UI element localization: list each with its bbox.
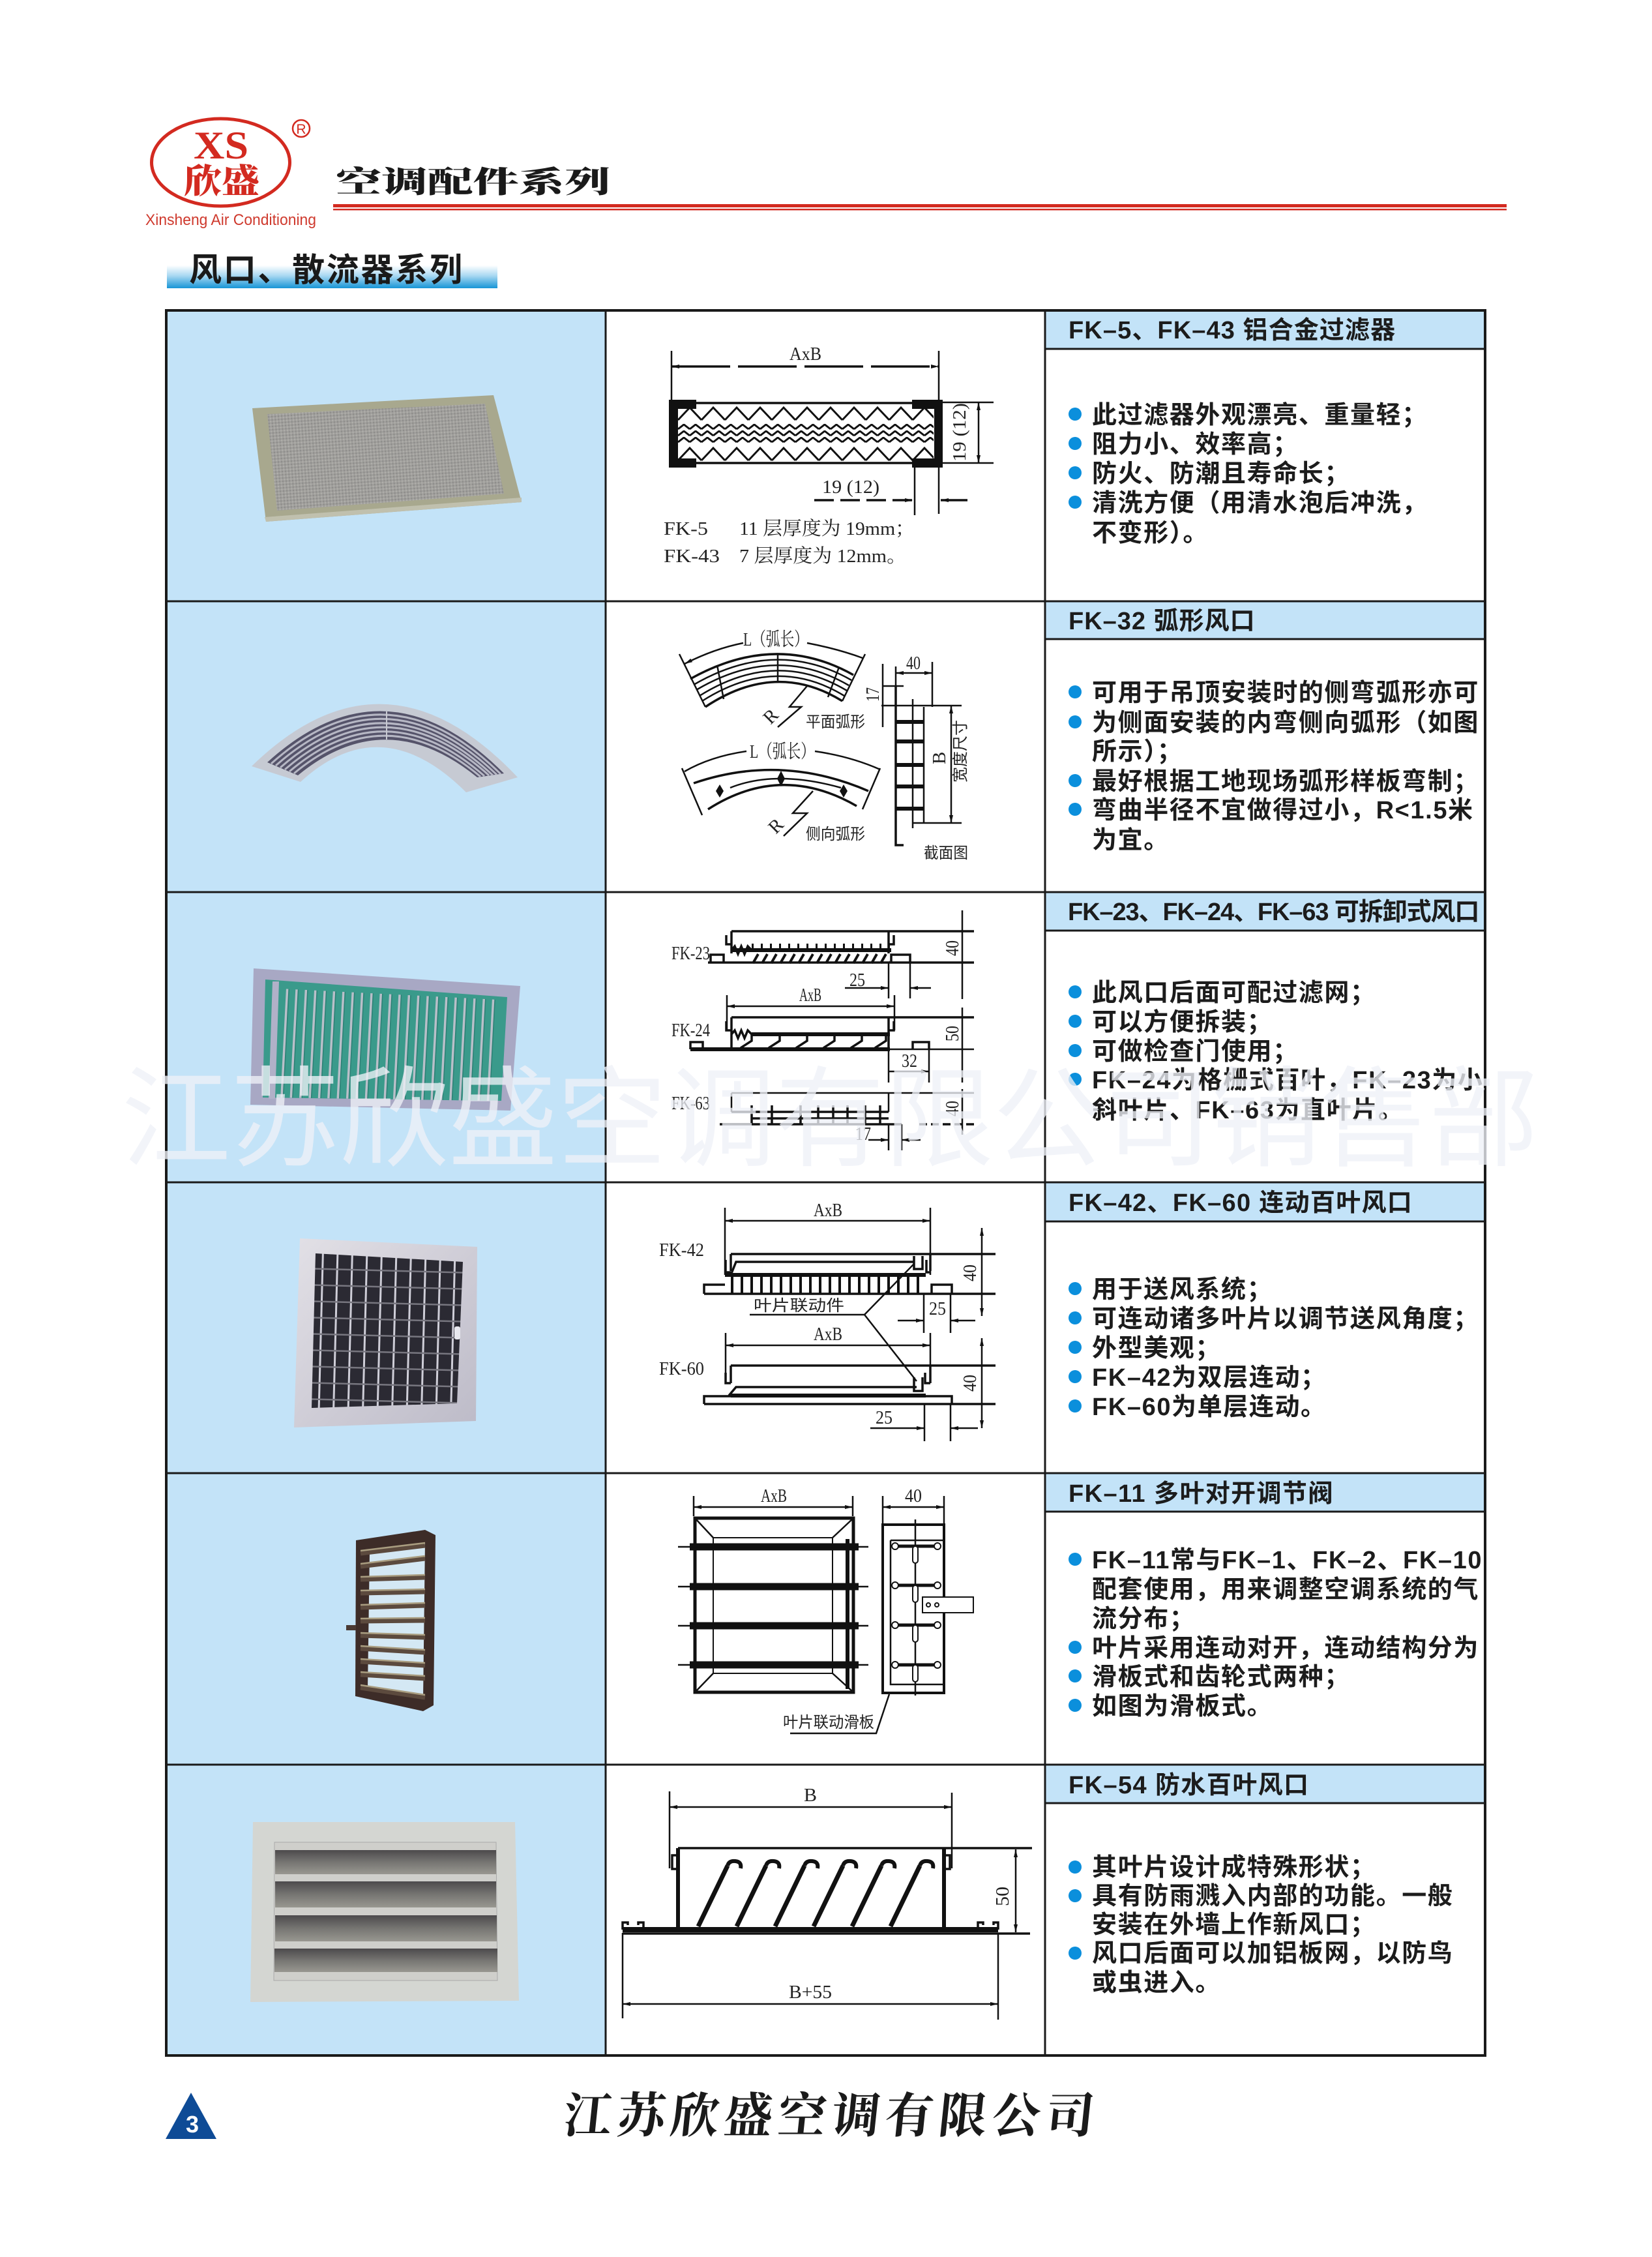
diagram: damper front and side: [678, 1486, 973, 1733]
description: FK-54: 或虫进入。: [1092, 1969, 1221, 1997]
diagram: curved vent plan and section: B: [929, 752, 950, 764]
diagram: filter section: 7 层厚度为 12mm。: [739, 545, 906, 567]
diagram: waterproof louver section: B: [804, 1785, 817, 1806]
diagram: linked louver sections: 40: [960, 1375, 981, 1392]
diagram: curved vent plan and section: 截面图: [924, 845, 968, 862]
header: logo: R: [296, 122, 306, 137]
photo: aluminium filter: [252, 395, 522, 522]
description: FK-5 FK-43: 不变形）。: [1092, 520, 1209, 547]
row 4: FK-42 FK-60 linked louver: [294, 1189, 1479, 1441]
description: FK-5 FK-43: [1069, 402, 1428, 547]
table grid lines: [166, 310, 1485, 2055]
FK-23 section: [671, 910, 974, 999]
diagram: curved vent plan and section: R: [764, 814, 788, 838]
diagram: removable vent sections: [671, 910, 974, 1150]
diagram: filter section: 19 (12): [949, 403, 970, 462]
photo: linked louver: [294, 1238, 477, 1427]
title: FK-23 FK-24 FK-63: FK–23、FK–24、FK–63 可拆卸式风口: [1068, 899, 1479, 926]
title: FK-54: FK–54 防水百叶风口: [1069, 1772, 1309, 1799]
diagram: curved vent plan and section: 17: [863, 687, 883, 702]
FK-23 section: FK-23: [671, 943, 710, 964]
photo: curved vent: [252, 704, 518, 792]
description: FK-23 FK-24 FK-63: [1069, 979, 1484, 1124]
description: FK-54: 其叶片设计成特殊形状；: [1092, 1854, 1376, 1881]
diagram: curved vent plan and section: 侧向弧形: [806, 826, 865, 843]
description: FK-32: 为宜。: [1092, 827, 1170, 854]
diagram: linked louver sections: [659, 1200, 996, 1441]
title: FK-32: FK–32 弧形风口: [1069, 608, 1256, 635]
title: FK-5 FK-43: FK–5、FK–43 铝合金过滤器: [1069, 317, 1396, 344]
FK-24 section: [671, 985, 974, 1083]
description: FK-11: 流分布；: [1092, 1606, 1195, 1633]
FK-63 section: FK-63: [671, 1093, 710, 1114]
description: FK-23 FK-24 FK-63: FK–24为格栅式百叶，FK–23为小: [1092, 1067, 1484, 1094]
description: FK-23 FK-24 FK-63: 可以方便拆装；: [1092, 1009, 1273, 1036]
diagram: curved vent plan and section: R: [759, 704, 783, 728]
description: FK-42 FK-60: FK–60为单层连动。: [1092, 1394, 1327, 1421]
description: FK-42 FK-60: [1069, 1276, 1479, 1421]
diagram: filter section: FK-43: [664, 546, 720, 567]
description: FK-5 FK-43: 防火、防潮且寿命长；: [1092, 460, 1350, 488]
diagram: linked louver sections: 叶片联动件: [754, 1297, 844, 1315]
description: FK-11: 如图为滑板式。: [1092, 1693, 1273, 1720]
diagram: damper front and side: 叶片联动滑板: [783, 1714, 874, 1731]
diagram: filter section: 19 (12): [822, 477, 879, 498]
diagram: curved vent plan and section: L（弧长）: [750, 741, 815, 762]
header: logo: XS: [194, 124, 248, 167]
diagram: waterproof louver section: [623, 1785, 1032, 2020]
description: FK-32: 可用于吊顶安装时的侧弯弧形亦可: [1092, 680, 1479, 707]
description: FK-54: 具有防雨溅入内部的功能。一般: [1092, 1883, 1453, 1910]
diagram: linked louver sections: 25: [929, 1298, 946, 1319]
title: FK-42 FK-60: FK–42、FK–60 连动百叶风口: [1069, 1189, 1413, 1217]
diagram: linked louver sections: 25: [876, 1407, 892, 1428]
header: series title: 空调配件系列: [336, 166, 610, 199]
diagram: linked louver sections: FK-42: [659, 1240, 704, 1261]
photo: damper: [346, 1530, 435, 1711]
diagram: linked louver sections: AxB: [814, 1324, 842, 1345]
FK-24 section: AxB: [799, 985, 821, 1006]
row 6: FK-54 waterproof louver: [250, 1772, 1453, 2020]
description: FK-32: [1069, 680, 1479, 854]
diagram: damper front and side: AxB: [761, 1486, 787, 1506]
photo: removable vent: [250, 968, 520, 1111]
description: FK-11: 配套使用，用来调整空调系统的气: [1092, 1576, 1479, 1604]
description: FK-5 FK-43: 清洗方便（用清水泡后冲洗，: [1092, 490, 1428, 517]
row 3: FK-23 FK-24 FK-63 removable vent: [250, 899, 1484, 1150]
diagram: linked louver sections: FK-60: [659, 1358, 704, 1379]
description: FK-11: [1069, 1547, 1482, 1720]
photo: waterproof louver: [250, 1822, 519, 2002]
watermark: 江苏欣盛空调有限公司销售部: [121, 1058, 1539, 1181]
FK-23 section: 25: [849, 970, 865, 991]
FK-24 section: FK-24: [671, 1020, 710, 1041]
description: FK-42 FK-60: FK–42为双层连动；: [1092, 1364, 1327, 1392]
FK-63 section: [671, 1089, 974, 1150]
table backgrounds: [166, 310, 1485, 2055]
description: FK-11: FK–11常与FK–1、FK–2、FK–10: [1092, 1547, 1482, 1574]
diagram: waterproof louver section: B+55: [789, 1982, 832, 2003]
header: logo: Xinsheng Air Conditioning: [145, 211, 316, 229]
row 1: FK-5 FK-43 filter: [252, 317, 1428, 567]
FK-63 section: 17: [855, 1124, 871, 1144]
header: logo: [145, 119, 316, 229]
description: FK-42 FK-60: 可连动诸多叶片以调节送风角度；: [1092, 1306, 1479, 1333]
description: FK-54: 安装在外墙上作新风口；: [1092, 1911, 1376, 1939]
diagram: filter section: FK-5: [664, 518, 708, 539]
diagram: curved vent plan and section: 40: [906, 653, 921, 674]
diagram: damper front and side: 40: [905, 1486, 922, 1506]
footer: page number: [166, 2093, 216, 2139]
row 5: FK-11 damper: [346, 1480, 1482, 1733]
description: FK-42 FK-60: 外型美观；: [1092, 1335, 1221, 1362]
FK-23 section: 40: [942, 940, 963, 956]
description: FK-5 FK-43: 阻力小、效率高；: [1092, 431, 1299, 458]
diagram: filter section: 11 层厚度为 19mm；: [739, 518, 915, 539]
description: FK-23 FK-24 FK-63: 可做检查门使用；: [1092, 1038, 1299, 1066]
FK-24 section: 50: [942, 1026, 963, 1041]
header: red double rule: [333, 204, 1507, 210]
product table: [166, 310, 1485, 2055]
description: FK-32: 为侧面安装的内弯侧向弧形（如图: [1092, 710, 1479, 737]
footer: page number: 3: [186, 2111, 199, 2138]
diagram: curved vent plan and section: 平面弧形: [806, 713, 865, 731]
description: FK-11: 叶片采用连动对开，连动结构分为: [1092, 1635, 1479, 1662]
diagram: waterproof louver section: 50: [992, 1887, 1013, 1906]
diagram: filter section: AxB: [789, 344, 821, 365]
description: FK-32: 最好根据工地现场弧形样板弯制；: [1092, 768, 1479, 796]
description: FK-23 FK-24 FK-63: 斜叶片、FK–63为直叶片。: [1092, 1097, 1404, 1124]
description: FK-54: [1069, 1854, 1453, 1997]
section heading: 风口、散流器系列: [189, 252, 462, 288]
diagram: linked louver sections: 40: [960, 1264, 981, 1281]
description: FK-23 FK-24 FK-63: 此风口后面可配过滤网；: [1092, 979, 1376, 1007]
footer: company name: 江苏欣盛空调有限公司: [561, 2090, 1097, 2144]
description: FK-54: 风口后面可以加铝板网，以防鸟: [1092, 1940, 1453, 1967]
header: logo: 欣盛: [184, 162, 259, 201]
title: FK-11: FK–11 多叶对开调节阀: [1069, 1480, 1334, 1508]
diagram: linked louver sections: AxB: [814, 1200, 842, 1221]
row 2: FK-32 curved vent: [252, 608, 1479, 862]
description: FK-11: 滑板式和齿轮式两种；: [1092, 1664, 1350, 1691]
diagram: curved vent plan and section: [679, 629, 969, 862]
diagram: filter section: [664, 344, 994, 567]
FK-24 section: 32: [902, 1051, 917, 1071]
description: FK-32: 所示）；: [1092, 738, 1183, 766]
description: FK-42 FK-60: 用于送风系统；: [1092, 1276, 1273, 1304]
FK-63 section: 40: [942, 1101, 963, 1116]
description: FK-32: 弯曲半径不宜做得过小，R<1.5米: [1092, 797, 1474, 824]
description: FK-5 FK-43: 此过滤器外观漂亮、重量轻；: [1092, 402, 1428, 429]
diagram: curved vent plan and section: 宽度尺寸: [952, 720, 969, 783]
diagram: curved vent plan and section: L（弧长）: [743, 629, 808, 650]
